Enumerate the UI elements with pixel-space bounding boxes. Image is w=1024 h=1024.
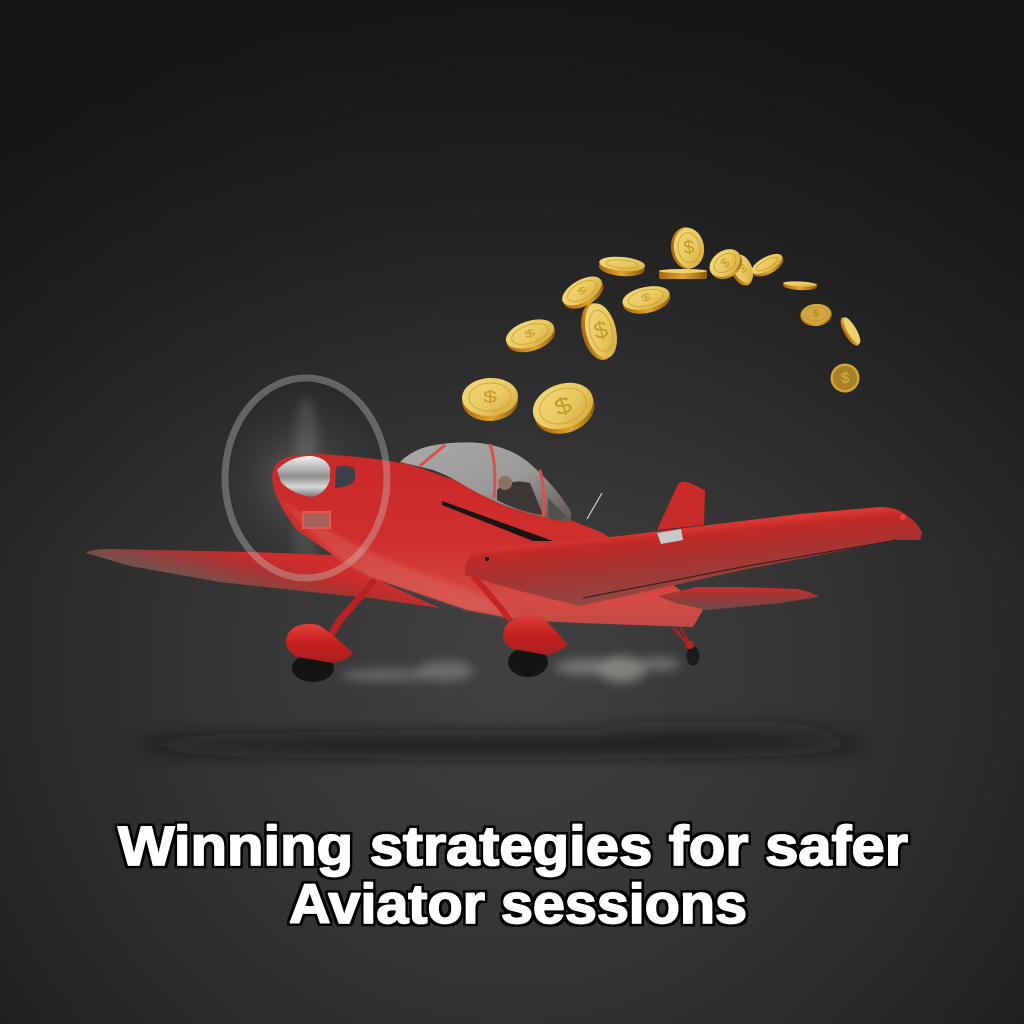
propeller ring [225,378,387,578]
coin 5: $ [591,316,611,345]
cowling window [335,466,355,488]
coin 10: $ [718,254,733,271]
smoke trail [340,656,680,682]
right wing [465,507,922,606]
propeller blur disc [225,378,387,578]
coin 11: $ [737,261,749,276]
coin 16 [830,364,860,392]
coin 14: $ [813,308,820,320]
title line 1: Winning strategies for safer [118,814,908,877]
coin 1 [461,377,519,422]
coin 8 [668,225,707,271]
coin 7 [620,282,673,318]
coin 10 [704,243,748,285]
left landing gear [286,580,375,682]
fuselage [272,454,704,627]
wing light [657,529,683,544]
antenna [587,493,602,519]
coin 4: $ [575,284,589,298]
coin 13 [783,281,817,291]
ground shadow [130,726,870,753]
coin 3 [502,314,559,358]
coin 16: $ [841,370,850,386]
coin 1: $ [483,387,498,407]
vertical tail fin [657,482,705,530]
coin 3: $ [523,327,537,341]
coin 15 [837,314,864,348]
coin 2 [526,375,601,442]
coin 5 [576,299,623,363]
fuselage stripe [442,501,553,541]
airplane [86,378,922,682]
coin 2: $ [551,391,575,421]
coin 6 [598,255,646,278]
tail wheel [673,626,700,666]
coin 9 [659,269,707,279]
coin 7: $ [640,292,652,304]
title line 2: Aviator sessions [289,872,747,935]
coin 8: $ [682,237,696,259]
left wing [86,549,440,608]
canopy [400,442,571,523]
coin stream [461,225,864,442]
spinner [277,456,330,497]
stabilizer [658,587,819,610]
coin 11 [726,251,758,289]
right landing gear [473,576,568,677]
coin 4 [557,270,609,315]
title [118,814,908,935]
coin 12 [749,250,787,281]
coin 14 [799,303,833,327]
cowling air intake [303,512,330,528]
